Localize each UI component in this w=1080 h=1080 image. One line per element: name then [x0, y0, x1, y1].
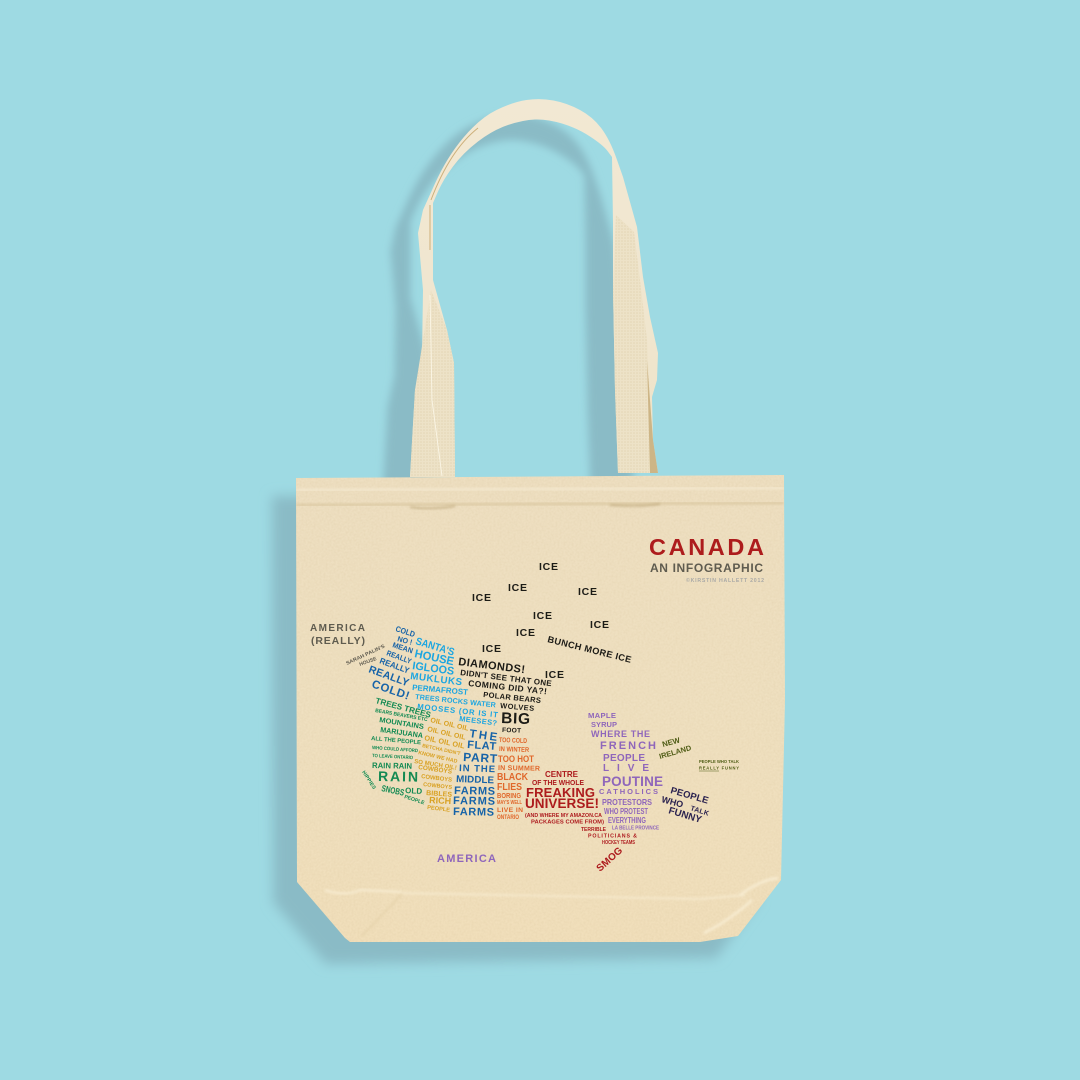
- region: British Columbia: BEARS BEAVERS ETC: [375, 708, 428, 723]
- region: Manitoba: ONTARIO: [497, 815, 519, 821]
- region: Saskatchewan: IN THE: [459, 763, 495, 775]
- label: America (really): [310, 623, 365, 647]
- region: Nunavut: DIDN'T SEE THAT ONE: [460, 668, 553, 688]
- region: Manitoba: MAY'S WELL: [497, 800, 522, 806]
- region: Alberta: KNOW WE HAD: [418, 750, 458, 765]
- region: Northwest Territories: PERMAFROST: [412, 683, 469, 697]
- region: Ontario: OF THE WHOLE: [532, 778, 584, 787]
- region: Northwest Territories: IGLOOS: [412, 660, 455, 678]
- region: ice, arctic islands: BUNCH MORE ICE: [547, 634, 632, 665]
- region: British Columbia: RAIN: [378, 768, 418, 785]
- region: Ontario: HOCKEY TEAMS: [602, 840, 636, 846]
- region: Northwest Territories: TREES ROCKS WATER: [415, 692, 497, 710]
- region: British Columbia: MARIJUANA: [380, 725, 424, 740]
- region: Quebec: WHO PROTEST: [604, 807, 648, 816]
- region: Quebec: [588, 711, 663, 832]
- region: Saskatchewan: PART: [463, 750, 498, 766]
- region: Nunavut: COMING DID YA?!: [468, 678, 548, 696]
- region: Quebec: LIVE: [603, 763, 649, 774]
- region: Yukon: MEAN: [391, 640, 414, 655]
- label: America (really): (REALLY): [311, 635, 365, 647]
- region: Saskatchewan: THE: [469, 728, 498, 744]
- region: Maritimes: PEOPLE: [669, 785, 710, 807]
- region: Yukon: COLD!: [370, 678, 411, 703]
- region: Alberta: COWBOYS: [421, 774, 452, 784]
- region: Yukon: REALLY: [378, 655, 411, 676]
- region: Quebec: MAPLE: [588, 711, 616, 720]
- region: Northwest Territories: HOUSE: [413, 648, 455, 668]
- region: Yukon: REALLY: [367, 664, 411, 689]
- title block: [649, 534, 764, 584]
- region: Quebec: FRENCH: [600, 740, 656, 752]
- region: Yukon: NO !: [396, 634, 413, 647]
- region: Ontario: [525, 769, 637, 874]
- tote bag handles: [410, 99, 658, 477]
- region: ice, arctic islands: ICE: [578, 586, 597, 598]
- region: Nunavut: BIG: [501, 710, 530, 728]
- region: Manitoba: BORING: [497, 793, 521, 800]
- region: ice, arctic islands: ICE: [545, 669, 564, 681]
- region: Ontario: SMOG: [595, 845, 625, 874]
- region: Alberta: OIL OIL OIL: [427, 726, 467, 742]
- region: Alberta: OIL OIL OIL: [424, 733, 466, 751]
- region: Manitoba: IN WINTER: [499, 746, 529, 754]
- region: British Columbia: SNOBS: [381, 783, 405, 798]
- title block: AN INFOGRAPHIC: [650, 561, 763, 575]
- region: Saskatchewan: MIDDLE: [456, 774, 495, 786]
- region: Alberta: BETCHA DIDN'T: [422, 743, 461, 757]
- region: Manitoba: TOO COLD: [499, 737, 527, 745]
- region: British Columbia: PEOPLE: [403, 794, 426, 807]
- printed infographic: [310, 534, 764, 874]
- region: Nunavut: WOLVES: [500, 701, 535, 713]
- region: Quebec: EVERYTHING: [608, 816, 646, 825]
- region: Nunavut: POLAR BEARS: [483, 690, 541, 705]
- region: Yukon: COLD: [394, 624, 416, 639]
- region: British Columbia: TREES TREES: [374, 696, 432, 720]
- region: Manitoba: LIVE IN: [497, 807, 523, 814]
- region: British Columbia: HIPPIES: [360, 770, 377, 791]
- region: Quebec: WHERE THE: [591, 729, 650, 739]
- title block: ©KIRSTIN HALLETT 2012: [686, 577, 764, 584]
- region: Saskatchewan: FARMS: [454, 785, 495, 798]
- region: Quebec: PEOPLE: [603, 753, 645, 764]
- region: Newfoundland: PEOPLE WHO TALK: [699, 759, 739, 764]
- region: British Columbia: [360, 696, 432, 807]
- region: Quebec: PROTESTORS: [602, 797, 652, 807]
- region: British Columbia: TO LEAVE ONTARIO: [372, 753, 413, 761]
- label: Sarah Palin's house: SARAH PALIN'S: [345, 643, 387, 667]
- region: British Columbia: OLD: [405, 786, 423, 796]
- region: Northwest Territories: SANTA'S: [414, 635, 456, 659]
- region: British Columbia: MOUNTAINS: [379, 715, 425, 731]
- region: Saskatchewan: [453, 728, 498, 819]
- region: ice, arctic islands: ICE: [539, 561, 558, 573]
- region: Maritimes: TALK: [689, 805, 710, 818]
- handle strap: [410, 99, 658, 477]
- region: ice, arctic islands: ICE: [516, 627, 535, 639]
- region: ice, arctic islands: ICE: [472, 592, 491, 604]
- region: ice, arctic islands: ICE: [533, 610, 552, 622]
- region: ice, arctic islands: ICE: [482, 643, 501, 655]
- region: Ontario: FREAKING: [526, 785, 595, 800]
- region: Alberta: PEOPLE: [427, 805, 451, 814]
- region: Quebec: POUTINE: [602, 774, 663, 789]
- region: Alberta: BIBLES: [426, 790, 453, 799]
- region: Ontario: POLITICIANS &: [588, 834, 637, 840]
- region: Manitoba: IN SUMMER: [498, 765, 540, 773]
- region: British Columbia: WHO COULD AFFORD: [372, 745, 419, 754]
- label: America (really): AMERICA: [310, 623, 365, 634]
- region: ice, arctic islands: ICE: [508, 582, 527, 594]
- region: Yukon: REALLY: [385, 648, 413, 666]
- region: ice, arctic islands: [472, 561, 632, 681]
- region: Quebec: LA BELLE PROVINCE: [612, 826, 660, 832]
- region: Yukon: [367, 624, 416, 703]
- region: British Columbia: ALL THE PEOPLE: [371, 736, 421, 746]
- region: Northwest Territories: MUKLUKS: [410, 671, 463, 688]
- region: Manitoba: BLACK: [497, 772, 529, 783]
- region: Manitoba: [497, 737, 540, 821]
- region: Quebec: SYRUP: [591, 720, 617, 729]
- region: Saskatchewan: FARMS: [453, 806, 494, 819]
- region: Alberta: [414, 717, 470, 814]
- region: British Columbia: RAIN RAIN: [372, 761, 412, 771]
- region: Ontario: PACKAGES COME FROM): [531, 820, 604, 826]
- label: Sarah Palin's house: HOUSE: [359, 656, 378, 668]
- region: Ontario: (AND WHERE MY AMAZON.CA: [525, 813, 603, 819]
- drop shadows of handles and bag: [272, 117, 762, 964]
- region: Northwest Territories: [410, 635, 499, 728]
- region: Newfoundland: [658, 735, 739, 771]
- region: Saskatchewan: FLAT: [467, 739, 497, 753]
- region: Maritimes: FUNNY: [667, 805, 703, 826]
- region: Northwest Territories: MEESES?: [459, 714, 498, 728]
- region: Newfoundland: REALLY FUNNY: [699, 766, 739, 770]
- region: Alberta: RICH: [429, 795, 451, 806]
- region: Ontario: UNIVERSE!: [525, 796, 599, 811]
- region: ice, arctic islands: ICE: [590, 619, 609, 631]
- region: Newfoundland: NEW: [661, 735, 682, 749]
- region: Maritimes: [660, 785, 710, 826]
- label: America: AMERICA: [437, 853, 496, 865]
- region: Ontario: TERRIBLE: [581, 827, 607, 833]
- region: Alberta: COWBOYS: [418, 764, 453, 776]
- region: Nunavut: [458, 656, 553, 735]
- region: Saskatchewan: FARMS: [453, 795, 495, 808]
- region: Nunavut: FOOT: [502, 727, 521, 735]
- region: Nunavut: DIAMONDS!: [458, 656, 526, 676]
- region: Alberta: COWBOYS: [423, 782, 453, 791]
- region: Quebec: CATHOLICS: [599, 787, 658, 796]
- region: Newfoundland: IRELAND: [658, 743, 693, 761]
- title block: CANADA: [649, 534, 764, 560]
- region: Ontario: CENTRE: [545, 769, 578, 779]
- region: Northwest Territories: MOOSES (OR IS IT: [417, 702, 499, 719]
- region: Alberta: OIL OIL OIL: [430, 717, 470, 733]
- region: Manitoba: FLIES: [497, 782, 522, 793]
- region: Alberta: SO MUCH OIL!: [414, 759, 457, 772]
- bag body: [290, 470, 790, 950]
- region: Maritimes: WHO: [660, 794, 684, 810]
- region: Manitoba: TOO HOT: [498, 754, 534, 764]
